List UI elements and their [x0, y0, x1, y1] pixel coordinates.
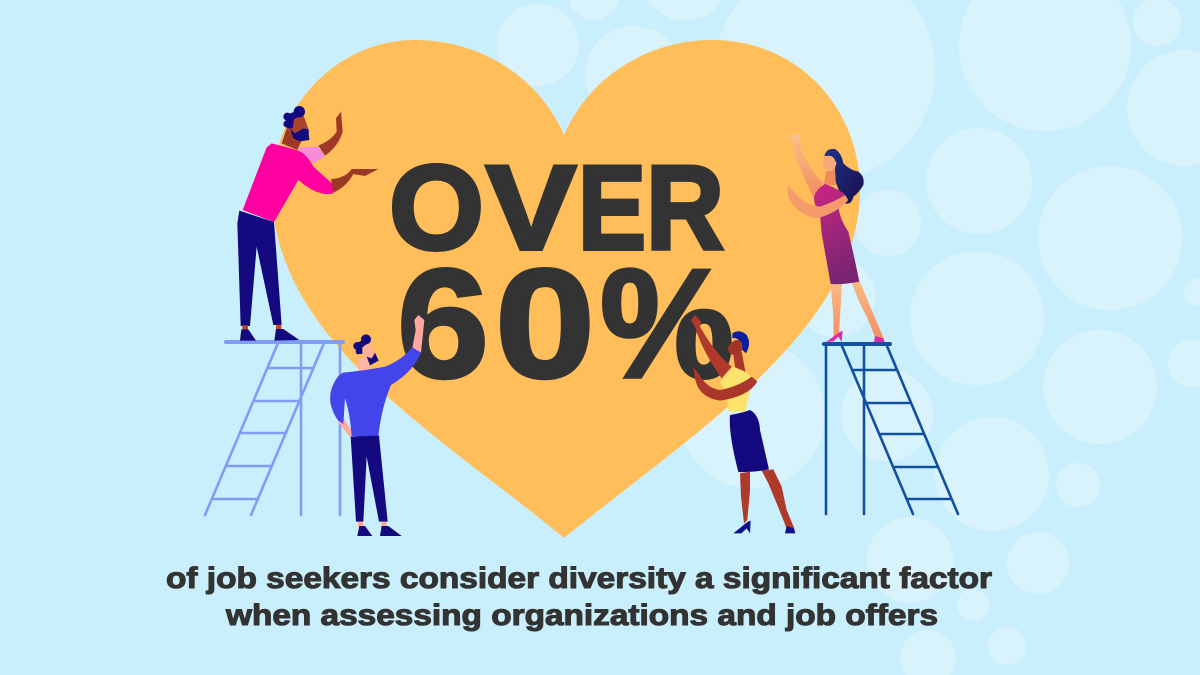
headline: OVER: O: [389, 141, 484, 275]
figure: man in pink on left ladder: [237, 106, 378, 341]
figure: woman in yellow top: [691, 315, 795, 533]
headline: 60%: 6: [397, 237, 489, 410]
caption line 1: of job seekers consider diversity a significant factor: [166, 562, 992, 595]
figure: man in blue reaching up: [330, 315, 424, 536]
left ladder: [205, 342, 343, 515]
headline: 60%: [397, 237, 734, 410]
headline: OVER: R: [646, 141, 724, 275]
background bubbles: [497, 0, 1200, 675]
headline: 60%: 0: [495, 237, 595, 410]
headline: OVER: V: [486, 141, 576, 275]
headline: 60%: %: [600, 237, 734, 410]
headline: OVER: E: [578, 141, 646, 275]
heart: [272, 40, 860, 538]
caption line 2: when assessing organizations and job offers: [225, 599, 938, 632]
figure: woman in dress on right ladder: [787, 134, 885, 342]
right ladder: [824, 344, 958, 514]
headline: OVER: [389, 141, 724, 275]
